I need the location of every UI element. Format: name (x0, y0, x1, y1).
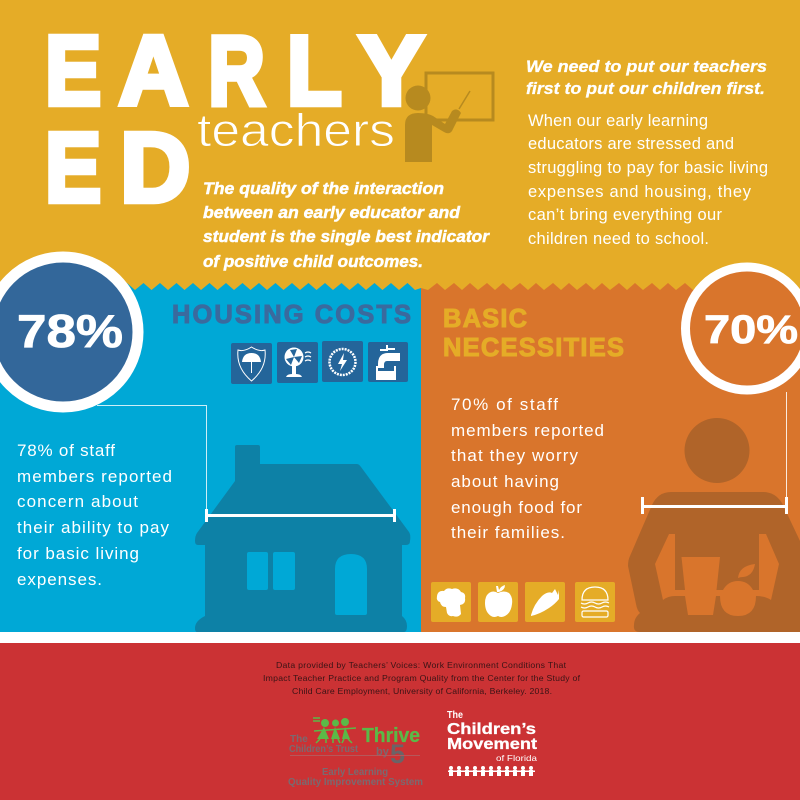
stat circle: 70%: 70% (704, 308, 798, 352)
logo: Thrive by 5: Children’s Trust (289, 743, 358, 755)
panel: housing costs background (0, 283, 421, 632)
food cut-outs (655, 534, 779, 616)
title: EARLY ED: R (208, 16, 265, 125)
logo: Thrive by 5: Quality Improvement System (288, 777, 423, 788)
text block: 78% of staff: members reported (17, 467, 172, 486)
text block: quality of interaction (203, 179, 490, 271)
measure bar: house width (205, 509, 396, 522)
paper doll chain (448, 766, 535, 776)
stat circle: 78% (0, 257, 138, 407)
text block: 78% of staff (17, 441, 172, 589)
text block: 70% of staff (451, 395, 604, 542)
text block: teachers first paragraph: expenses and housing, they (528, 183, 752, 201)
logo: Thrive by 5: Thrive (362, 725, 420, 747)
text block: data source: Impact Teacher Practice and Program Quality from the Center for the Study of (263, 673, 581, 683)
text block: quality of interaction: student is the single best indicator (203, 227, 490, 246)
logo: Thrive by 5: 5 (390, 739, 405, 769)
text block: data source (263, 660, 581, 696)
heading: basic necessities: NECESSITIES (443, 334, 624, 362)
icon: house (195, 445, 410, 632)
text block: teachers first heading (526, 57, 767, 98)
icon: burger (575, 582, 615, 622)
logo: The Children's Movement of Florida: Children’s (447, 721, 536, 738)
heading: teachers: teachers (197, 104, 395, 156)
text block: teachers first paragraph: can’t bring everything our (528, 206, 722, 224)
text block: teachers first paragraph: When our early learning (528, 112, 708, 130)
logo figures (313, 718, 356, 743)
text block: data source: Data provided by Teachers’ Voices: Work Environment Conditions That (276, 660, 567, 670)
panel: footer background (0, 643, 800, 800)
text block: teachers first paragraph: children need to school. (528, 230, 709, 248)
panel: basic necessities background (421, 283, 800, 632)
icon: fan (277, 342, 318, 383)
text block: teachers first heading: We need to put our teachers (526, 57, 767, 76)
logo: Thrive by 5: Early Learning (322, 767, 388, 778)
icon: water tap (368, 342, 408, 382)
text block: 78% of staff: expenses. (17, 570, 102, 589)
text block: teachers first heading: first to put our children first. (526, 79, 765, 98)
text block: 78% of staff: for basic living (17, 544, 139, 563)
heading: basic necessities: BASIC (443, 305, 527, 333)
heading: basic necessities (443, 305, 624, 362)
text block: 78% of staff: their ability to pay (17, 518, 170, 537)
logo: The Children's Movement of Florida: Movement (447, 736, 538, 753)
text block: quality of interaction: between an early educator and (203, 203, 461, 222)
title: EARLY ED: L (287, 16, 342, 125)
stat circle: 78%: 78% (17, 305, 123, 357)
icon: apple (478, 582, 518, 622)
icon: person with food (628, 418, 800, 632)
logo: The Children's Movement of Florida: The (447, 710, 463, 721)
title: EARLY ED: D (120, 113, 190, 222)
icon: umbrella shield (231, 343, 272, 384)
text block: 78% of staff: 78% of staff (17, 441, 115, 460)
title: EARLY ED: Y (359, 15, 424, 125)
icon: teacher pointing at board (405, 73, 493, 162)
title: EARLY ED: A (119, 15, 188, 125)
logo: The Children's Movement of Florida: of Florida (496, 753, 537, 763)
logo: Thrive by 5: by (376, 746, 390, 758)
text block: quality of interaction: of positive child outcomes. (203, 252, 423, 271)
text block: 78% of staff: concern about (17, 492, 138, 511)
measure bar: person width (641, 497, 788, 514)
text block: 70% of staff: that they worry (451, 446, 578, 465)
icon: carrot (525, 582, 565, 622)
text block: teachers first paragraph (528, 112, 768, 248)
logo: Thrive by 5: The (290, 734, 308, 745)
title: EARLY ED: E (45, 113, 101, 223)
text block: teachers first paragraph: educators are stressed and (528, 135, 734, 153)
heading: housing costs: HOUSING COSTS (172, 301, 411, 329)
title: EARLY ED: E (45, 16, 101, 126)
text block: 70% of staff: members reported (451, 421, 604, 440)
icon: broccoli (431, 582, 471, 622)
text block: 70% of staff: enough food for (451, 498, 582, 517)
text block: 70% of staff: 70% of staff (451, 395, 558, 414)
stat circle: 70% (686, 267, 800, 390)
connector line: circle to house (97, 406, 206, 515)
text block: 70% of staff: their families. (451, 523, 565, 542)
icon: power (322, 341, 363, 382)
title: EARLY ED (45, 15, 424, 223)
text block: teachers first paragraph: struggling to pay for basic living (528, 159, 768, 177)
connector line: circle to person (786, 392, 788, 505)
logo: Thrive by 5 (288, 718, 423, 788)
text block: 70% of staff: about having (451, 472, 559, 491)
text block: quality of interaction: The quality of the interaction (203, 179, 444, 198)
text block: data source: Child Care Employment, University of California, Berkeley. 2018. (292, 686, 552, 696)
panel: yellow header background (0, 0, 800, 300)
logo: The Children's Movement of Florida (447, 710, 538, 776)
